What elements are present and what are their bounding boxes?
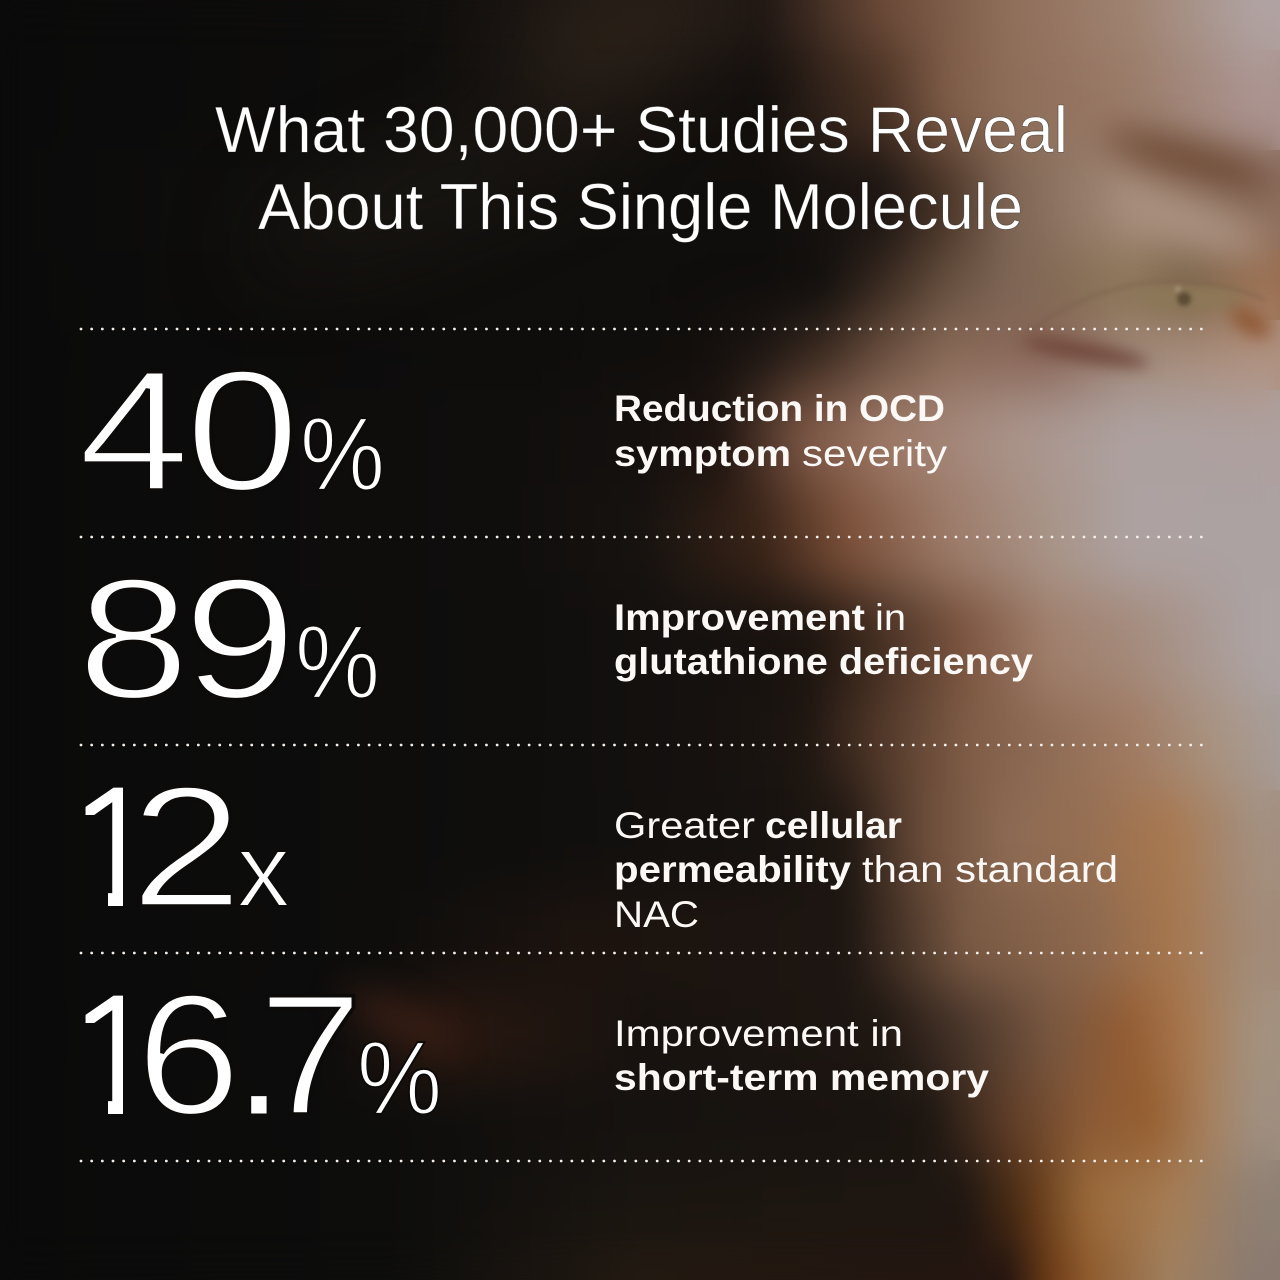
stat description: permeability: permeability — [614, 849, 851, 890]
stat description: permeability: Greater — [614, 805, 755, 846]
title — [215, 93, 1068, 243]
stat number: 89%: 8 — [77, 543, 190, 735]
stat number: 12x: x — [237, 813, 290, 929]
stat description: memory: short-term memory — [614, 1057, 989, 1098]
stat description: OCD: Reduction in OCD — [614, 388, 945, 429]
stat description: glutathione — [614, 597, 1033, 682]
stat number: 89%: 9 — [183, 543, 297, 735]
stat description: memory — [614, 1013, 989, 1098]
stat number: 40%: 4 — [78, 335, 190, 527]
stat description: glutathione: in — [875, 597, 906, 638]
stat description: OCD: symptom — [614, 433, 791, 474]
stat number: 12x: 1 — [69, 751, 165, 943]
stat number: 89% — [77, 543, 380, 735]
stat description: OCD — [614, 388, 948, 474]
stat description: permeability: cellular — [765, 805, 902, 846]
stat number: 12x: 2 — [130, 751, 243, 943]
stat number: 40%: 0 — [185, 335, 300, 527]
stat description: memory: Improvement in — [614, 1013, 903, 1054]
stat row: 89% improvement in glutathione deficiency — [77, 543, 1033, 735]
stat description: permeability: than standard — [862, 849, 1118, 890]
title: What 30,000+ Studies Reveal — [215, 93, 1068, 166]
stat number: 16.7%: 7 — [258, 959, 363, 1151]
stat description: permeability: NAC — [614, 894, 699, 935]
stat number: 89%: % — [295, 605, 380, 721]
stat row: 12x cellular permeability — [86, 788, 1116, 928]
stat description: permeability — [614, 805, 1118, 935]
stat number: 12x — [86, 788, 287, 906]
stat number: 40% — [78, 335, 385, 527]
stat number: 16.7%: 6 — [136, 959, 241, 1151]
stat description: glutathione: glutathione deficiency — [614, 641, 1033, 682]
stat number: 40%: % — [300, 397, 385, 513]
stat number: 16.7%: . — [235, 959, 283, 1151]
stat row: 16.7% improvement in short-term memory — [86, 994, 989, 1114]
stat number: 16.7%: % — [357, 1021, 442, 1137]
stat row: 40% reduction in OCD — [78, 335, 948, 527]
title: About This Single Molecule — [258, 170, 1023, 243]
stat description: glutathione: Improvement — [614, 597, 865, 638]
stat number: 16.7% — [86, 994, 440, 1114]
stat description: OCD: severity — [802, 433, 948, 474]
stat number: 16.7%: 1 — [69, 959, 165, 1151]
